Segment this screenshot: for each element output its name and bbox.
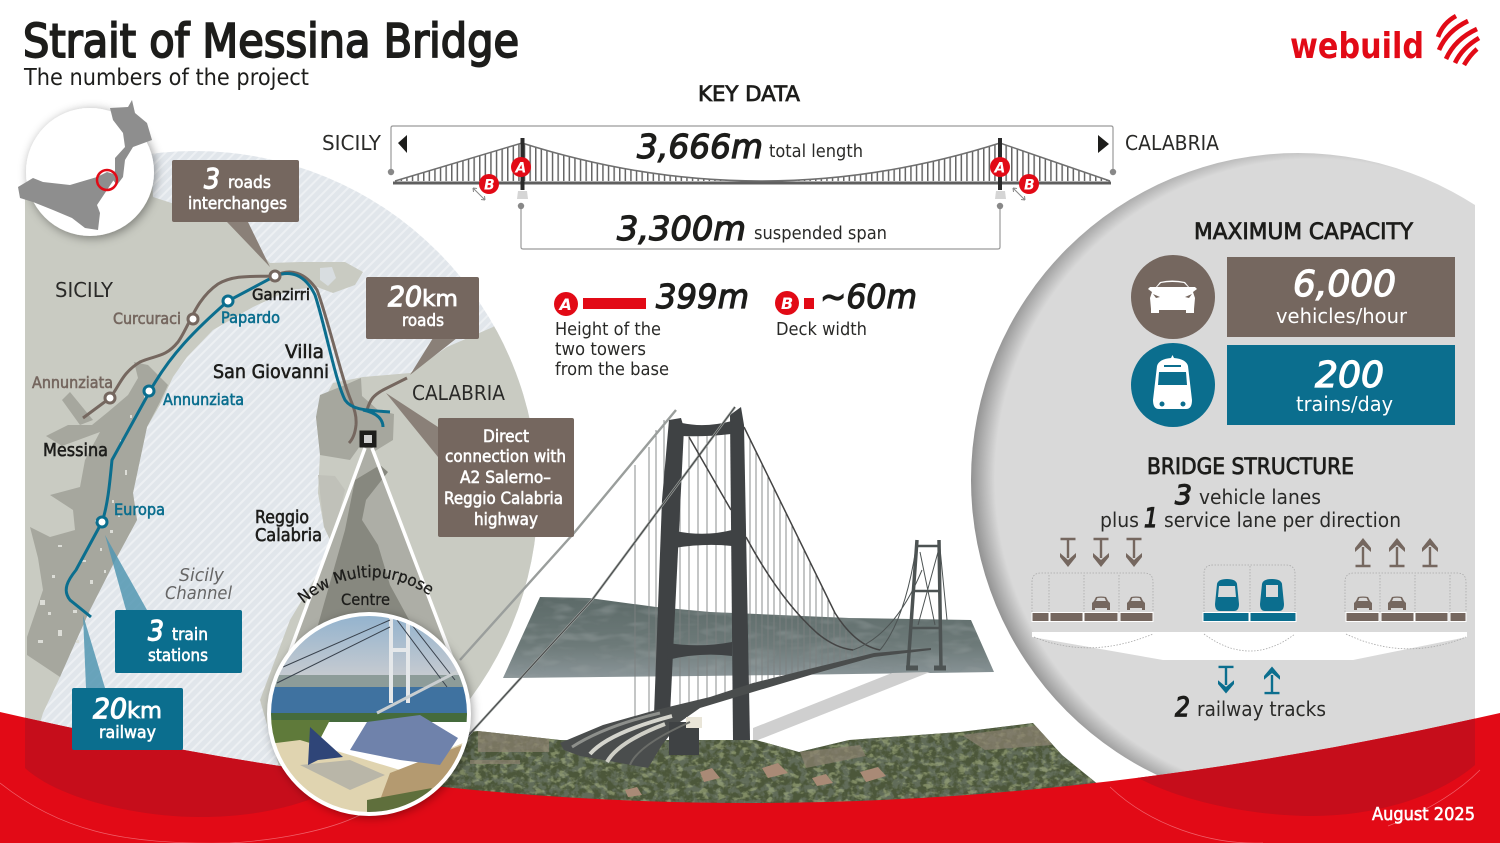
stat: deck width — [775, 277, 917, 340]
wedge outline — [288, 448, 454, 656]
callout: direct highway connection: connection with — [445, 447, 566, 467]
left carriageway — [1032, 612, 1153, 622]
deck underside — [1032, 632, 1467, 660]
callout: train stations: train — [172, 625, 208, 645]
photo inset: multipurpose centre — [260, 610, 480, 820]
text: vehicle lanes: 1 — [1144, 503, 1158, 534]
curved deck — [560, 648, 931, 768]
cars — [1092, 596, 1406, 610]
map labels — [32, 278, 505, 604]
callout: railway length: 20 — [93, 692, 127, 725]
text: railway tracks: 2 — [1175, 692, 1190, 723]
map labels: Curcuraci — [113, 309, 181, 328]
stat: total length: 3,666m — [637, 127, 763, 166]
label: Sicily: SICILY — [322, 131, 382, 155]
webuild logo — [1290, 16, 1479, 67]
Calabria peninsula — [110, 100, 152, 185]
callout: train stations — [115, 610, 242, 673]
stat: tower height: from the base — [555, 359, 669, 380]
stat: deck width: B — [781, 294, 793, 313]
mini locator map — [18, 100, 154, 236]
stat: trains per day: 200 — [1315, 355, 1384, 396]
hangers — [635, 420, 864, 725]
icon: train — [1131, 343, 1215, 427]
text: railway tracks — [1175, 692, 1326, 723]
right carriageway — [1346, 612, 1466, 622]
stat: tower height: A — [558, 295, 572, 314]
marker B left: B — [484, 178, 495, 194]
panel: location map — [25, 151, 536, 766]
bridge deck — [393, 182, 1111, 184]
text: vehicle lanes: 3 — [1175, 480, 1192, 511]
callout: direct highway connection: Direct — [483, 427, 529, 447]
stat: total length — [637, 127, 863, 166]
pointer: direct connection — [386, 393, 438, 457]
bridge hangers — [395, 143, 1110, 181]
callout: direct highway connection: Reggio Calabria — [444, 489, 563, 509]
stat: tower height — [554, 277, 749, 380]
far hills — [500, 595, 1000, 680]
far tower — [853, 540, 947, 670]
callout: road length: roads — [402, 311, 444, 331]
rail deck — [1203, 612, 1296, 622]
heading: bridge structure: BRIDGE STRUCTURE — [1147, 455, 1354, 480]
stat: suspended span: 3,300m — [617, 209, 746, 248]
label: Calabria: CALABRIA — [1125, 131, 1219, 155]
callout: railway length: railway — [99, 723, 156, 743]
terrain — [440, 723, 1096, 803]
icon: car — [1131, 255, 1215, 339]
text: vehicle lanes: vehicle lanes — [1199, 485, 1321, 509]
near tower — [654, 407, 750, 740]
stat: trains per day: trains/day — [1296, 392, 1393, 416]
stat: suspended span — [617, 209, 887, 248]
multipurpose centre marker — [360, 430, 376, 448]
callout: road length: km — [422, 287, 458, 312]
direction arrows — [398, 135, 1109, 153]
marker A left — [511, 157, 531, 177]
text: vehicle lanes: service lane per direction — [1164, 508, 1401, 532]
map labels: Ganzirri — [252, 285, 310, 304]
stat: tower height: two towers — [555, 339, 646, 360]
text: vehicle lanes — [1100, 480, 1401, 534]
station markers — [97, 271, 280, 527]
road route — [83, 272, 407, 443]
urban area: Messina — [27, 362, 168, 677]
key data heading: KEY DATA — [698, 82, 801, 106]
stat: vehicles per hour: vehicles/hour — [1276, 304, 1408, 328]
callout: railway length — [72, 688, 183, 750]
callout: train stations: stations — [148, 646, 208, 666]
map labels: Sicily — [179, 565, 224, 586]
callout: road interchanges: roads — [228, 173, 271, 193]
callout: road interchanges: 3 — [204, 162, 220, 195]
pointer: roads — [410, 338, 457, 375]
stat: vehicles per hour: 6,000 — [1293, 264, 1396, 305]
marker B right: B — [1024, 178, 1035, 194]
map labels: Messina — [43, 440, 108, 461]
stat: total length: total length — [769, 141, 863, 162]
red footer band — [0, 712, 1500, 843]
dotted lane outlines — [1032, 565, 1466, 651]
wedge dark land — [318, 466, 410, 626]
access ramps — [669, 722, 699, 755]
callout: direct highway connection: highway — [474, 510, 538, 530]
span bracket — [521, 206, 1000, 249]
stat: deck width: ~60m — [820, 277, 917, 316]
callout: railway length: km — [127, 699, 162, 724]
marker A left: A — [514, 160, 526, 176]
deck shadow — [753, 672, 930, 742]
marker A right — [990, 157, 1010, 177]
marker B left — [479, 174, 499, 194]
map land: Sicily — [25, 186, 363, 721]
pointer: railway — [83, 615, 105, 688]
pointer: train stations — [105, 535, 147, 610]
total length bracket — [391, 126, 1113, 172]
footer shading — [0, 718, 1480, 843]
map sea — [40, 151, 494, 766]
stat: tower height: 399m — [656, 277, 749, 316]
callout: road interchanges — [172, 160, 299, 222]
towers — [522, 138, 1000, 190]
map labels: CALABRIA — [412, 381, 505, 405]
title: Strait of Messina Bridge — [23, 14, 519, 68]
label: New Multipurpose Centre: Centre — [341, 590, 390, 609]
callout: road length — [366, 277, 479, 339]
bridge cross-section — [1032, 538, 1467, 694]
main cables — [460, 407, 735, 737]
stat: tower height: Height of the — [555, 319, 661, 340]
callout: road length: 20 — [388, 280, 422, 313]
map labels: Annunziata — [163, 390, 244, 409]
text: vehicle lanes: plus — [1100, 508, 1139, 532]
callout: road interchanges: interchanges — [188, 194, 287, 214]
date: August 2025 — [1372, 804, 1475, 825]
stat: deck width: Deck width — [776, 319, 867, 340]
lake details — [320, 267, 336, 286]
marker A right: A — [994, 160, 1005, 176]
map labels: Channel — [165, 583, 232, 604]
urban speckles — [38, 395, 146, 643]
map labels: Calabria — [255, 525, 322, 546]
stat: trains per day — [1227, 345, 1455, 425]
map labels: Annunziata — [32, 373, 113, 392]
map labels: Europa — [114, 500, 165, 519]
urban area: Villa San Giovanni — [316, 378, 394, 460]
webuild logo: webuild — [1290, 26, 1424, 67]
width arrows — [473, 188, 1025, 200]
railway route — [66, 273, 390, 617]
Sicily island — [18, 172, 117, 230]
callout: train stations: 3 — [148, 614, 164, 647]
label: New Multipurpose Centre: New Multipurpose — [297, 564, 432, 604]
road direction arrows — [1060, 538, 1438, 567]
heading: maximum capacity: MAXIMUM CAPACITY — [1194, 220, 1414, 245]
marker B right — [1019, 174, 1039, 194]
stat: suspended span: suspended span — [754, 223, 887, 244]
bridge photograph — [440, 407, 1120, 815]
map labels: San Giovanni — [213, 361, 329, 383]
trains — [1215, 579, 1284, 611]
strait marker — [97, 170, 117, 190]
callout: direct highway connection: A2 Salerno– — [460, 468, 551, 488]
stat: vehicles per hour — [1227, 257, 1455, 337]
pointer: interchanges — [227, 222, 270, 267]
subtitle: The numbers of the project — [23, 65, 309, 91]
panel: capacity and structure — [971, 153, 1500, 807]
map land: Calabria — [260, 326, 536, 766]
rail direction arrows — [1218, 666, 1280, 694]
text: railway tracks: railway tracks — [1197, 697, 1326, 721]
map labels: SICILY — [55, 278, 114, 302]
map labels: Villa — [285, 341, 324, 363]
magnifier wedge — [294, 448, 446, 647]
map labels: Reggio — [255, 507, 309, 528]
map labels: Papardo — [221, 308, 280, 327]
bridge elevation diagram — [388, 126, 1116, 249]
callout: direct highway connection — [438, 418, 574, 537]
